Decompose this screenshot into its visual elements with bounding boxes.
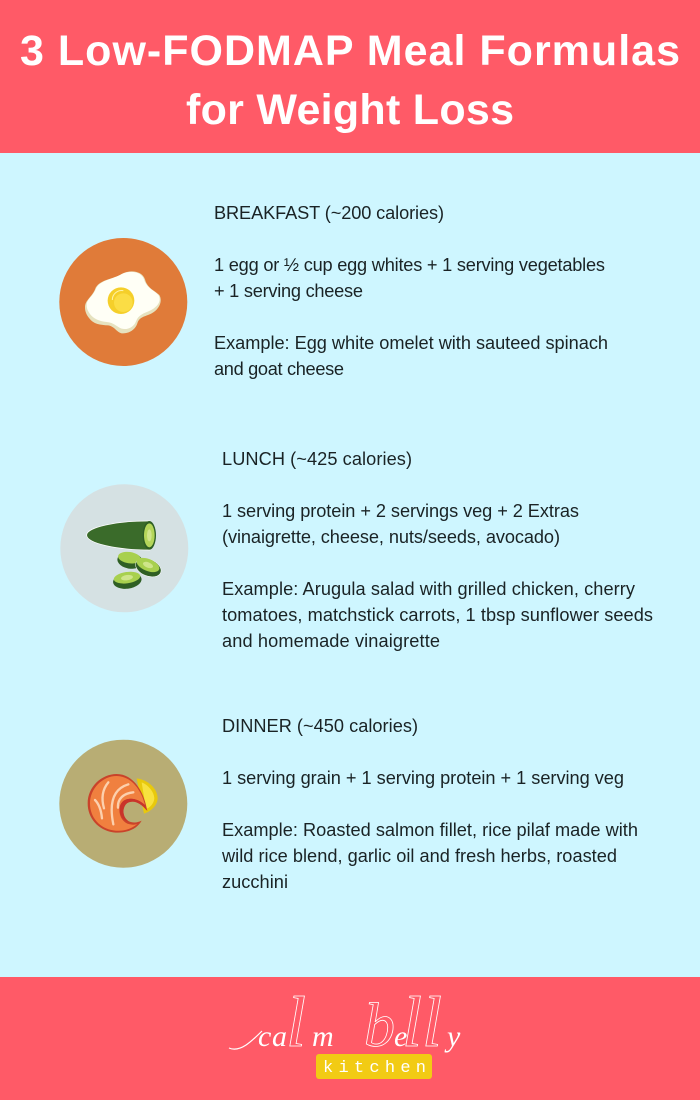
text block: breakfast: and goat cheese [214,359,344,379]
text block: lunch: and homemade vinaigrette [222,631,440,651]
footer banner [0,977,700,1100]
text block: lunch: Example: Arugula salad with grilled chicken, cherry [222,579,636,599]
title: 3 Low-FODMAP Meal Formulas [20,27,680,75]
text block: lunch [222,449,653,651]
logo: calm belly kitchen: kitchen [323,1059,426,1078]
text block: breakfast: BREAKFAST (~200 calories) [214,203,444,223]
text block: lunch: 1 serving protein + 2 servings veg + 2 Extras [222,501,579,521]
text block: dinner: wild rice blend, garlic oil and fresh herbs, roasted [221,846,617,866]
text block: dinner: Example: Roasted salmon fillet, rice pilaf made with [222,820,638,840]
logo: calm belly kitchen: e [394,1020,407,1053]
logo: calm belly kitchen: c [258,1020,271,1053]
header banner [0,0,700,153]
logo: calm belly kitchen [229,982,461,1079]
text block: breakfast [214,203,608,379]
logo: calm belly kitchen: l [402,982,422,1062]
icon: fried egg [59,238,187,366]
text block: breakfast: 1 egg or ½ cup egg whites + 1 serving vegetables [214,255,605,275]
logo: calm belly kitchen: y [444,1020,461,1053]
logo: calm belly kitchen: b [364,992,395,1060]
icon: cucumber [60,484,188,612]
text block: lunch: LUNCH (~425 calories) [222,449,412,469]
text block: dinner: zucchini [222,872,288,892]
logo: calm belly kitchen: l [422,982,442,1062]
text block: dinner: 1 serving grain + 1 serving protein + 1 serving veg [222,768,624,788]
logo: calm belly kitchen: a [272,1020,287,1053]
title [20,27,680,134]
text block: lunch: tomatoes, matchstick carrots, 1 tbsp sunflower seeds [222,605,653,625]
text block: breakfast: + 1 serving cheese [214,281,363,301]
logo: calm belly kitchen: l [286,982,306,1062]
text block: lunch: (vinaigrette, cheese, nuts/seeds, avocado) [222,527,560,547]
text block: dinner: DINNER (~450 calories) [222,716,418,736]
icon: salmon and lemon [59,740,187,868]
text block: breakfast: Example: Egg white omelet with sauteed spinach [214,333,608,353]
logo: calm belly kitchen: m [312,1020,334,1053]
text block: dinner [221,716,638,892]
title: for Weight Loss [186,86,514,134]
